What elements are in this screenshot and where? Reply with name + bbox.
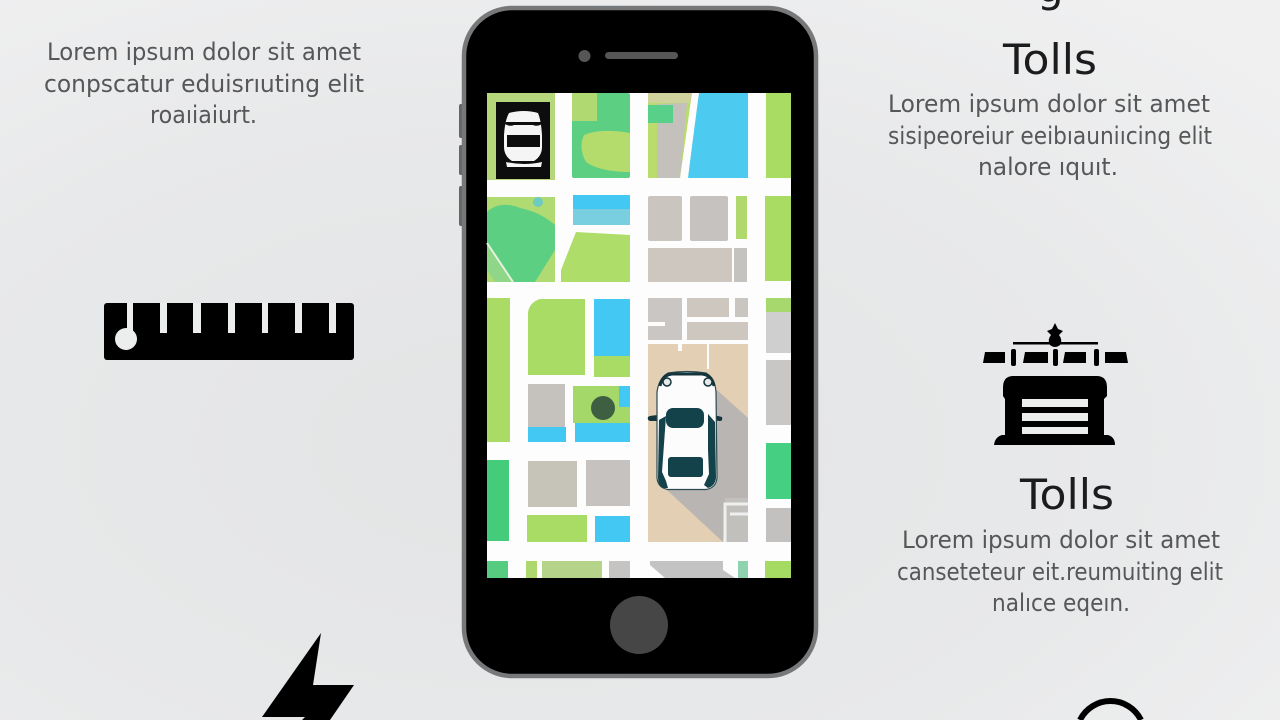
car front outline — [660, 374, 714, 386]
heading: Tolls lower: Tolls — [1019, 470, 1114, 519]
car headlights — [663, 378, 671, 386]
car mirrors — [648, 413, 722, 421]
icon: cropped circle at bottom right — [1080, 701, 1141, 720]
text block: top right description: Lorem ipsum dolor sit amet — [888, 90, 1210, 118]
speaker — [605, 52, 678, 59]
text block: lower right description: canseteteur eit.reumuiting elit — [897, 558, 1223, 586]
heading: Tolls top: Tolls — [1002, 35, 1097, 84]
map bottom row blocks — [487, 561, 791, 578]
text block: top right description: nalore ıquıt. — [978, 153, 1118, 181]
text block: top left description: Lorem ipsum dolor sit amet — [47, 38, 361, 66]
map screen — [487, 93, 791, 578]
text block: top left description: conpscatur eduisrıuting elit — [44, 70, 364, 98]
map pin dot — [591, 396, 615, 420]
map row 2 blocks — [487, 195, 791, 282]
map row 3 blocks — [487, 298, 791, 542]
map row 1 blocks — [487, 93, 791, 180]
car windshield — [666, 408, 704, 428]
text block: top left description — [44, 38, 364, 129]
text block: top right description — [888, 90, 1212, 181]
icon: car badge on map — [496, 102, 550, 179]
toll booth — [994, 376, 1115, 445]
text block: top right description: sisipeoreiur eeibıauniıcing elit — [888, 122, 1212, 150]
phone — [459, 8, 816, 676]
text block: lower right description: Lorem ipsum dolor sit amet — [902, 526, 1220, 554]
camera — [578, 50, 590, 62]
destination lot with route shadow — [648, 341, 748, 542]
text block: lower right description — [897, 526, 1223, 617]
text block: lower right description: nalıce eqeın. — [992, 589, 1130, 617]
car rear window — [668, 457, 703, 477]
car side strips — [658, 414, 716, 488]
car — [648, 372, 722, 490]
icon: lightning bolt — [262, 633, 354, 720]
phone side buttons — [459, 104, 464, 226]
icon: toll gantry — [983, 323, 1128, 445]
gantry beam — [983, 323, 1128, 366]
map row 4 blocks — [487, 460, 630, 542]
home button — [610, 596, 668, 654]
car body — [657, 372, 717, 490]
text block: top left description: roaıiaiurt. — [150, 101, 257, 129]
phone body — [464, 8, 816, 676]
icon: ruler — [104, 303, 354, 360]
